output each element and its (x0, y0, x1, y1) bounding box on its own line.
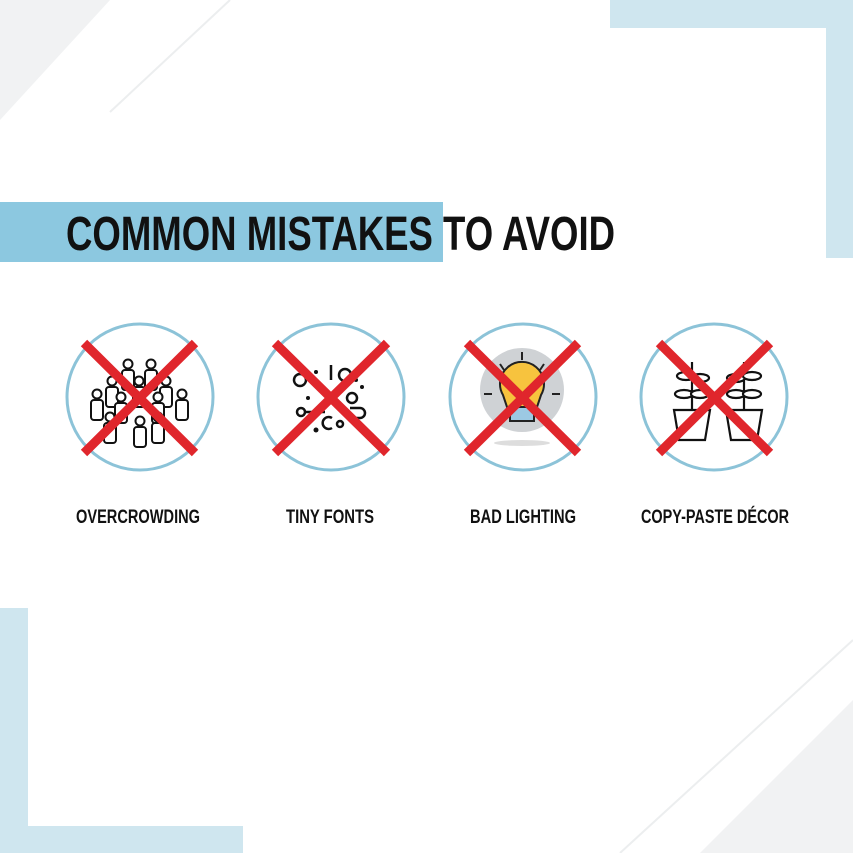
title: COMMON MISTAKES TO AVOID (66, 208, 615, 261)
title (0, 202, 615, 262)
icon: overcrowding (67, 324, 213, 470)
label: tiny fonts: TINY FONTS (286, 507, 374, 528)
icon: tiny fonts (258, 324, 404, 470)
label: copy-paste decor: COPY-PASTE DÉCOR (641, 506, 789, 528)
label: overcrowding: OVERCROWDING (76, 507, 200, 528)
icon: bad lighting (450, 324, 596, 470)
icon: copy-paste decor (641, 324, 787, 470)
frame: top-right corner (610, 0, 853, 258)
label: bad lighting: BAD LIGHTING (470, 507, 576, 528)
frame: bottom-left corner (0, 608, 243, 853)
